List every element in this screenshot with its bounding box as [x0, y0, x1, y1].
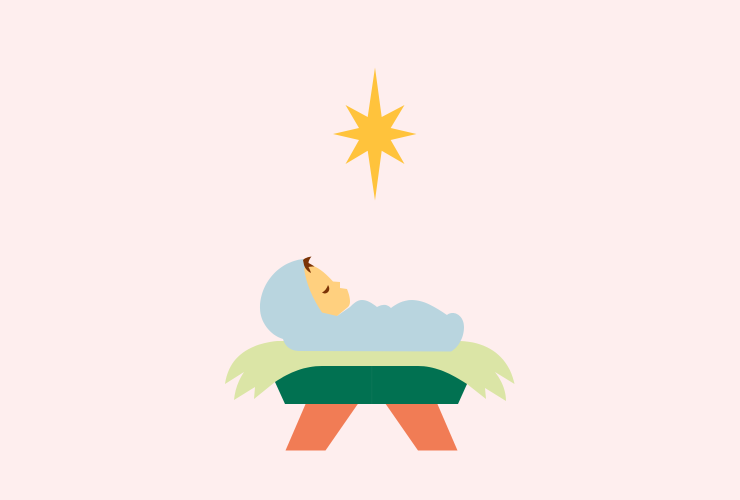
manger right half: [372, 366, 467, 404]
manger left half: [275, 366, 372, 404]
manger centre seam: [371, 366, 373, 404]
manger box: [275, 366, 467, 404]
hay: [225, 341, 514, 401]
icon: star: [333, 68, 416, 200]
blanket: [260, 259, 464, 352]
hair: [303, 256, 314, 273]
manger legs: [286, 403, 458, 450]
left leg: [286, 403, 358, 450]
right leg: [385, 403, 458, 450]
closed eye: [322, 285, 329, 293]
baby face: [304, 266, 350, 316]
